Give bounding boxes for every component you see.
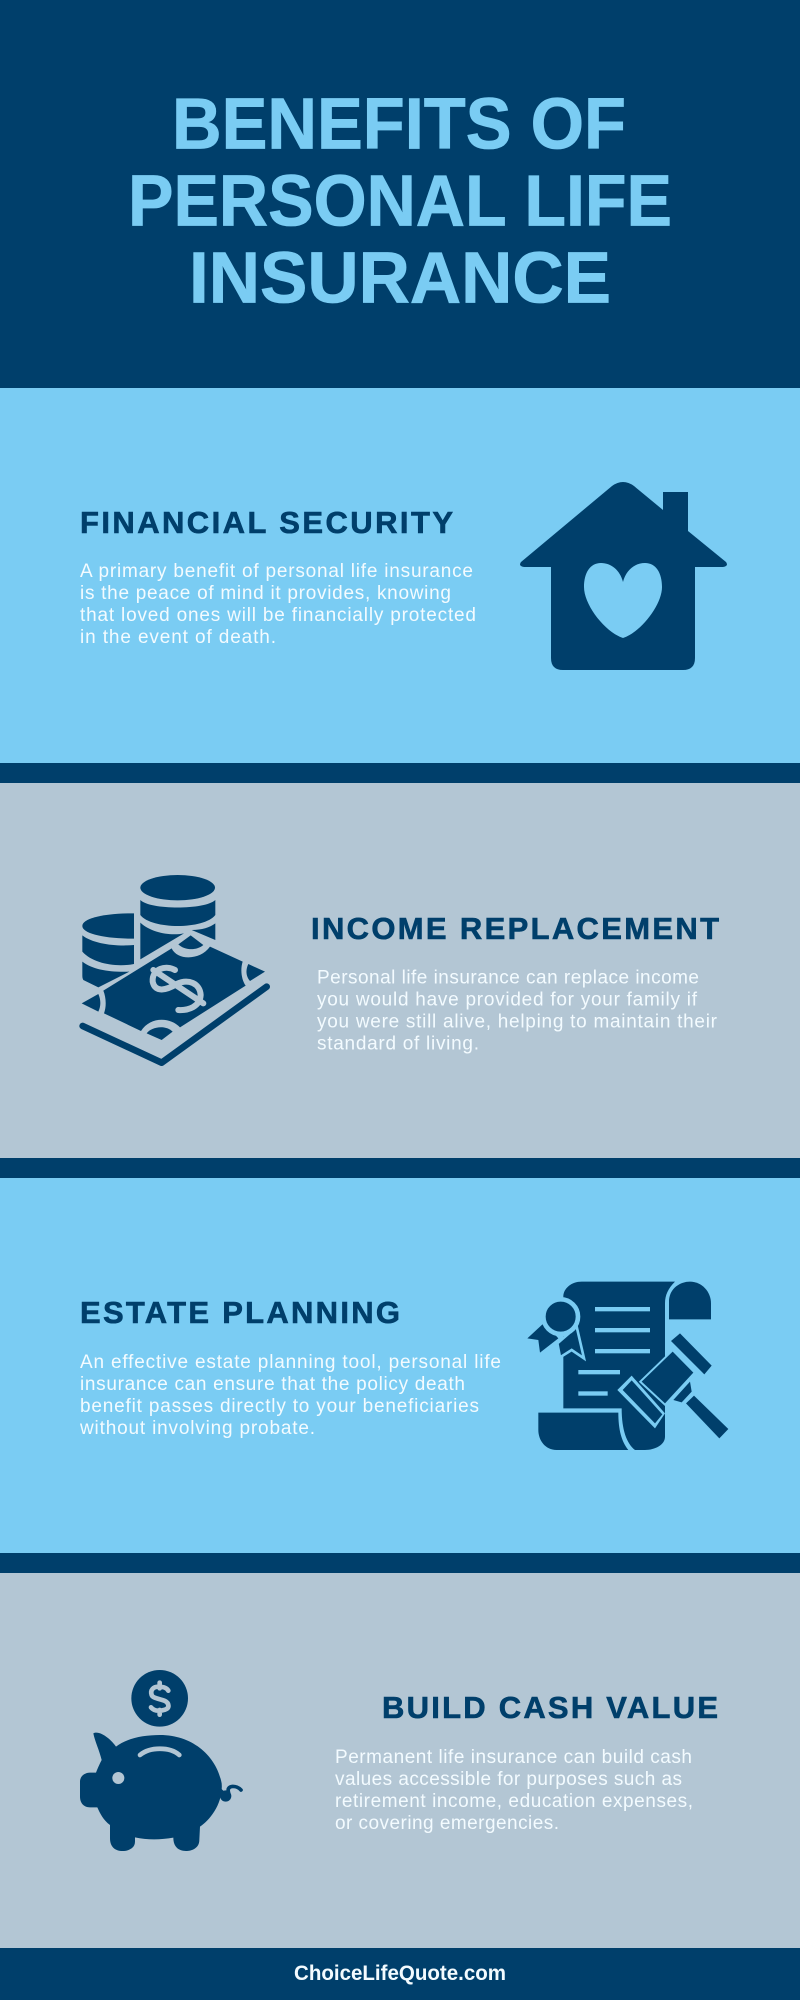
divider band 2	[0, 1158, 800, 1178]
text block: financial security: that loved ones will be financially protected	[80, 605, 476, 626]
footer	[0, 1948, 800, 2000]
text block: income replacement: standard of living.	[317, 1034, 479, 1054]
panel: estate planning	[0, 1178, 800, 1553]
text block: estate planning: An effective estate planning tool, personal life	[80, 1352, 501, 1373]
icon: house with heart	[520, 482, 727, 670]
panel: income replacement	[0, 783, 800, 1158]
text block: financial security: is the peace of mind it provides, knowing	[80, 583, 451, 604]
icon: coins and banknote	[82, 875, 267, 1063]
heading: financial security: FINANCIAL SECURITY	[80, 505, 453, 540]
text block: financial security: A primary benefit of personal life insurance	[80, 561, 473, 582]
icon: piggy bank with coin	[80, 1670, 241, 1851]
title: BENEFITS OF	[172, 84, 626, 164]
heading: build cash value: BUILD CASH VALUE	[382, 1690, 718, 1725]
text block: financial security	[80, 561, 476, 648]
panel: build cash value	[0, 1573, 800, 1948]
text block: estate planning	[79, 1352, 501, 1439]
footer website text: ChoiceLifeQuote.com	[294, 1962, 506, 1985]
text block: estate planning: benefit passes directly to your beneficiaries	[80, 1396, 479, 1417]
text block: estate planning: without involving probate.	[79, 1418, 315, 1439]
divider band 3	[0, 1553, 800, 1573]
text block: income replacement: you would have provided for your family if	[317, 990, 698, 1010]
text block: build cash value: values accessible for purposes such as	[335, 1769, 682, 1790]
title: PERSONAL LIFE	[128, 162, 672, 242]
text block: build cash value: or covering emergencies.	[335, 1813, 559, 1834]
text block: estate planning: insurance can ensure that the policy death	[80, 1374, 465, 1395]
title	[128, 84, 672, 318]
divider band 1	[0, 763, 800, 783]
text block: build cash value: Permanent life insurance can build cash	[335, 1747, 692, 1768]
text block: income replacement: Personal life insurance can replace income	[317, 968, 699, 988]
text block: income replacement: you were still alive, helping to maintain their	[317, 1012, 718, 1032]
icon: legal scroll and gavel	[527, 1282, 728, 1450]
title: INSURANCE	[189, 238, 611, 318]
text block: financial security: in the event of death.	[80, 627, 276, 648]
heading: estate planning: ESTATE PLANNING	[80, 1295, 400, 1330]
text block: income replacement	[317, 968, 718, 1054]
heading: income replacement: INCOME REPLACEMENT	[311, 911, 719, 946]
panel: financial security	[0, 388, 800, 763]
text block: build cash value: retirement income, education expenses,	[335, 1791, 693, 1812]
text block: build cash value	[335, 1747, 693, 1834]
header panel	[0, 0, 800, 388]
